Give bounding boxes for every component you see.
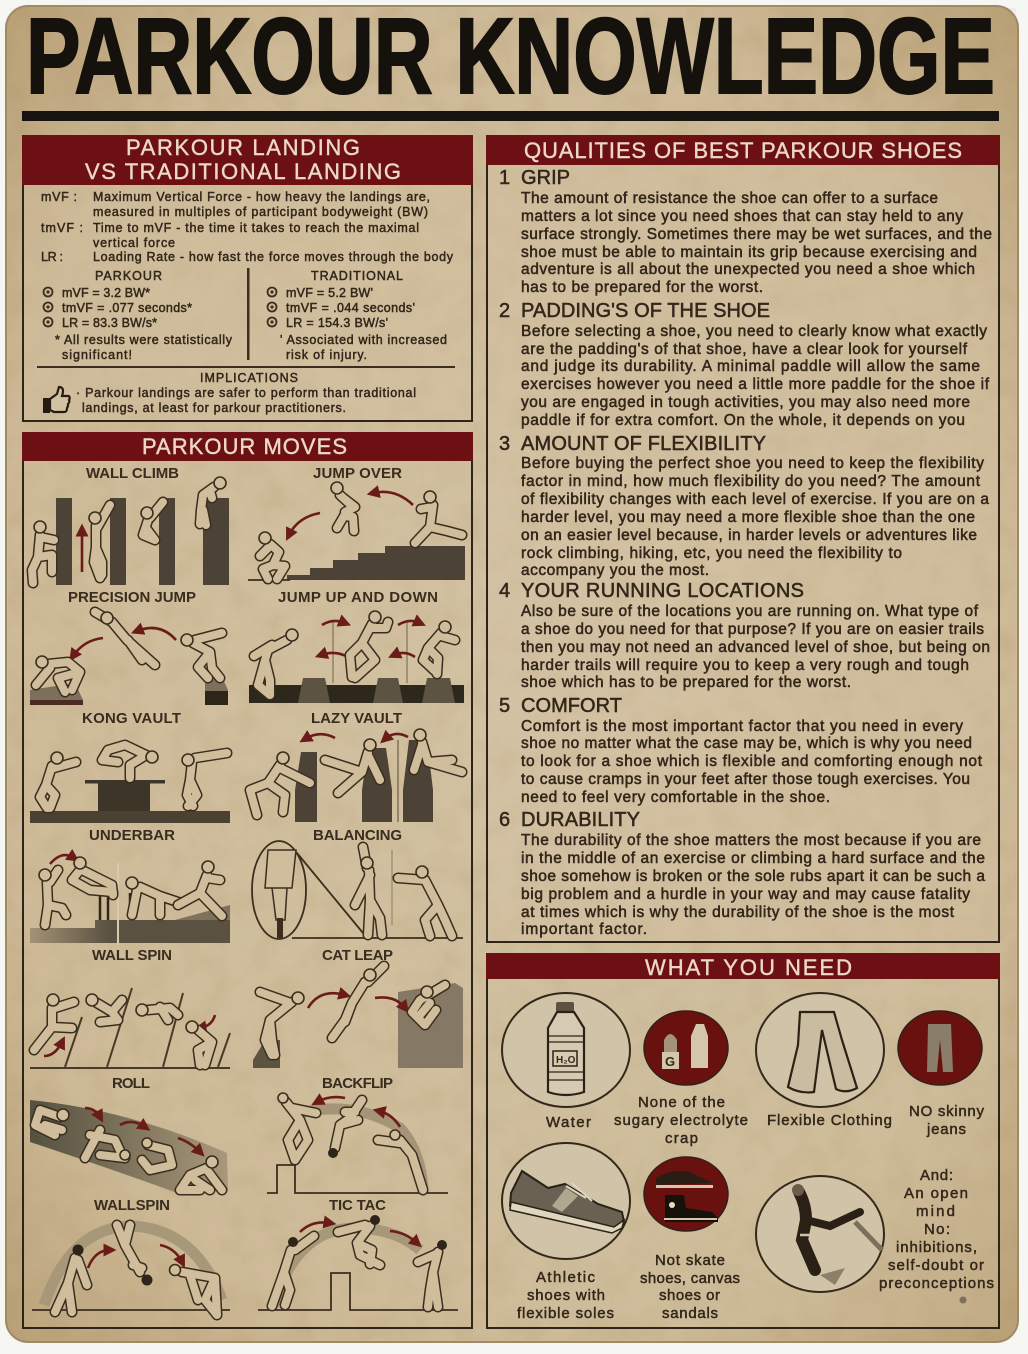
section 4: running locations: [499, 580, 990, 691]
move: jump over: JUMP OVER: [313, 465, 402, 482]
section 6: durability: big problem and a hurdle in your way and may cause fatality: [521, 886, 970, 903]
move: jump up and down: JUMP UP AND DOWN: [278, 589, 438, 606]
item: athletic shoes: Athletic: [536, 1269, 596, 1286]
section 1: grip: The amount of resistance the shoe can offer to a surface: [521, 190, 938, 207]
item: open mind: An open: [904, 1185, 968, 1202]
landing header: VS TRADITIONAL LANDING: [85, 159, 401, 184]
section 1: grip: [499, 167, 992, 296]
section 1: grip: surface strongly. Sometimes there may be wet surfaces, and the: [521, 226, 992, 243]
parkour results: PARKOUR: [95, 269, 162, 283]
item: no skate shoes: shoes or: [659, 1287, 720, 1304]
section 2: padding: paddle if for extra comfort. On the whole, it depends on you: [521, 412, 965, 429]
item: athletic shoes: shoes with: [527, 1287, 605, 1304]
traditional results: TRADITIONAL: [311, 269, 403, 283]
item: open mind: And:: [920, 1167, 953, 1184]
move: wall spin: [30, 947, 230, 1068]
definitions: Maximum Vertical Force - how heavy the landings are,: [93, 190, 430, 204]
section 6: durability: DURABILITY: [521, 809, 640, 831]
section 5: comfort: to cause cramps in your feet after those tough exercises. You: [521, 771, 970, 788]
section 2: padding: PADDING'S OF THE SHOE: [521, 300, 770, 322]
section 3: flexibility: harder level, you may need a more flexible shoe than the one: [521, 509, 975, 526]
section 4: running locations: Also be sure of the locations you are running on. What type of: [521, 603, 979, 620]
parkour results: tmVF = .077 seconds*: [62, 301, 192, 315]
section 5: comfort: [499, 695, 983, 806]
section 3: flexibility: on an easier level because, in harder levels or adventures like: [521, 527, 977, 544]
section 3: flexibility: Before buying the perfect shoe you need to keep the flexibility: [521, 455, 984, 472]
traditional results: mVF = 5.2 BW': [286, 286, 373, 300]
section 2: padding: are the padding's of that shoe, have a clear look for yourself: [521, 341, 968, 358]
panel: landing comparison: [22, 135, 473, 421]
section 2: padding: Before selecting a shoe, you need to clearly know what exactly: [521, 323, 987, 340]
move: kong vault: KONG VAULT: [82, 710, 181, 727]
move: balancing: BALANCING: [313, 827, 402, 844]
definitions: measured in multiples of participant bodyweight (BW): [93, 205, 428, 219]
item: no electrolyte drinks: None of the: [638, 1094, 725, 1111]
move: precision jump: PRECISION JUMP: [68, 589, 196, 606]
section 6: durability: in the middle of an exercise or climbing a hard surface and the: [521, 850, 985, 867]
icon: skinny jeans: [927, 1024, 953, 1072]
implications: landings, at least for parkour practitioners.: [82, 401, 346, 415]
implications: · Parkour landings are safer to perform than traditional: [76, 386, 416, 400]
item: open mind: preconceptions: [879, 1275, 994, 1292]
section 4: running locations: then you may not need an advanced level of shoe, but being on: [521, 639, 990, 656]
definitions: Loading Rate - how fast the force moves through the body: [93, 250, 454, 264]
section 5: comfort: 5: [499, 695, 510, 717]
icon: sports drinks: G: [665, 1054, 675, 1069]
panel: what you need: [486, 953, 1000, 1328]
item: athletic shoes: [502, 1143, 630, 1322]
need header: [486, 953, 1000, 980]
traditional results: tmVF = .044 seconds': [286, 301, 415, 315]
definitions: Time to mVF - the time it takes to reach the maximal: [93, 221, 419, 235]
section 5: comfort: COMFORT: [521, 695, 622, 717]
item: no skinny jeans: [898, 1011, 984, 1138]
panel: parkour moves: [22, 432, 473, 1328]
icon: loose trousers: [788, 1012, 857, 1092]
item: no skate shoes: shoes, canvas: [640, 1270, 740, 1287]
item: open mind: mind: [916, 1203, 955, 1220]
section 1: grip: has to be prepared for the worst.: [521, 279, 763, 296]
item: athletic shoes: flexible soles: [517, 1305, 614, 1322]
item: no skate shoes: [640, 1157, 740, 1322]
item: flexible clothing: [756, 993, 892, 1129]
move: balancing: [252, 827, 463, 939]
definitions: [41, 190, 454, 264]
move: wall spin: WALL SPIN: [92, 947, 172, 964]
implications: [43, 371, 416, 415]
item: no skate shoes: Not skate: [655, 1252, 725, 1269]
move: lazy vault: [250, 710, 462, 822]
traditional results: [268, 269, 447, 362]
item: open mind: No:: [924, 1221, 950, 1238]
section 3: flexibility: factor in mind, how much flexibility do you need? The amount: [521, 473, 981, 490]
item: no electrolyte drinks: [614, 1011, 748, 1147]
move: lazy vault: LAZY VAULT: [311, 710, 402, 727]
section 5: comfort: to look for a shoe which is flexible and comforting enough not: [521, 753, 983, 770]
parkour results: mVF = 3.2 BW*: [62, 286, 150, 300]
move: cat leap: CAT LEAP: [322, 947, 393, 964]
section 6: durability: 6: [499, 809, 510, 831]
move: jump up and down: [249, 589, 464, 703]
traditional results: LR = 154.3 BW/s': [286, 316, 388, 330]
section 3: flexibility: of flexibility changes with each level of exercise. If you are on a: [521, 491, 989, 508]
section 3: flexibility: rock climbing, hiking, etc, you need the flexibility to: [521, 545, 902, 562]
move: wall climb: [32, 465, 229, 585]
section 2: padding: and judge its durability. A minimal paddle will allow the same: [521, 358, 980, 375]
traditional results: ' Associated with increased: [280, 333, 447, 347]
item: no skinny jeans: NO skinny: [909, 1103, 984, 1120]
panel: qualities of best parkour shoes: [486, 135, 1000, 942]
move: jump over: [248, 465, 465, 580]
move: wallspin: WALLSPIN: [94, 1197, 170, 1214]
section 4: running locations: shoe which has to be prepared for the worst.: [521, 674, 851, 691]
section 5: comfort: Comfort is the most important factor that you need in every: [521, 718, 963, 735]
item: open mind: [756, 1167, 994, 1292]
moves header: PARKOUR MOVES: [142, 434, 347, 459]
section 5: comfort: need to feel very comfortable in the shoe.: [521, 789, 830, 806]
move: backflip: BACKFLIP: [322, 1075, 393, 1092]
section 1: grip: shoe must be able to maintain its grip because exercising and: [521, 244, 977, 261]
landing header: [22, 135, 473, 185]
parkour results: significant!: [62, 348, 132, 362]
icon: running shoe: [510, 1171, 624, 1233]
move: tic tac: [258, 1197, 458, 1310]
move: tic tac: TIC TAC: [329, 1197, 386, 1214]
moves header: [22, 432, 473, 461]
item: no skate shoes: sandals: [662, 1305, 718, 1322]
icon: fighter kicking: [792, 1184, 882, 1285]
icon: skate shoe and high-top: [656, 1171, 718, 1222]
definitions: tmVF :: [41, 221, 83, 235]
section 2: padding: exercises however you need a little more paddle for the shoe if: [521, 376, 990, 393]
parkour results: * All results were statistically: [55, 333, 233, 347]
section 2: padding: you are engaged in tough activities, you may also need more: [521, 394, 970, 411]
section 2: padding: [499, 300, 990, 429]
landing header: PARKOUR LANDING: [126, 135, 360, 160]
move: roll: ROLL: [112, 1075, 150, 1092]
definitions: mVF :: [41, 190, 77, 204]
parkour results: LR = 83.3 BW/s*: [62, 316, 157, 330]
section 4: running locations: harder trails will require you to keep a very rough and tough: [521, 657, 969, 674]
section 4: running locations: a shoe do you need for that purpose? If you are on easier trails: [521, 621, 984, 638]
need header: WHAT YOU NEED: [645, 955, 852, 980]
item: no electrolyte drinks: sugary electrolyte: [614, 1112, 748, 1129]
section 6: durability: The durability of the shoe matters the most because if you are: [521, 832, 981, 849]
section 1: grip: matters a lot since you need shoes that can stay held to any: [521, 208, 963, 225]
section 5: comfort: shoe no matter what the case may be, which is why you need: [521, 735, 972, 752]
section 3: flexibility: accompany you the most.: [521, 562, 709, 579]
icon: water bottle: H₂O: [556, 1055, 576, 1066]
section 6: durability: shoe somehow is broken or the sole rubs apart it can be such a: [521, 868, 985, 885]
section 1: grip: GRIP: [521, 167, 570, 189]
move: roll: [30, 1075, 228, 1194]
section 6: durability: important factor.: [521, 921, 647, 938]
section 4: running locations: YOUR RUNNING LOCATIONS: [521, 580, 804, 602]
move: precision jump: [30, 589, 228, 705]
traditional results: risk of injury.: [286, 348, 367, 362]
item: no electrolyte drinks: crap: [665, 1130, 698, 1147]
section 2: padding: 2: [499, 300, 510, 322]
icon: thumbs up: [43, 387, 70, 413]
item: open mind: self-doubt or: [888, 1257, 984, 1274]
item: water: Water: [546, 1114, 591, 1131]
move: underbar: UNDERBAR: [89, 827, 175, 844]
move: kong vault: [30, 710, 230, 823]
section 3: flexibility: 3: [499, 433, 510, 455]
move: underbar: [30, 827, 230, 945]
shoes header: QUALITIES OF BEST PARKOUR SHOES: [524, 138, 962, 163]
item: no skinny jeans: jeans: [926, 1121, 966, 1138]
item: water: [502, 993, 630, 1131]
move: wall climb: WALL CLIMB: [86, 465, 179, 482]
definitions: vertical force: [93, 236, 175, 250]
section 6: durability: [499, 809, 985, 938]
parkour results: [44, 269, 233, 362]
move: cat leap: [253, 947, 463, 1068]
move: backflip: [267, 1075, 448, 1193]
section 3: flexibility: AMOUNT OF FLEXIBILITY: [521, 433, 766, 455]
section 4: running locations: 4: [499, 580, 510, 602]
item: flexible clothing: Flexible Clothing: [767, 1112, 892, 1129]
move: wallspin: [32, 1197, 230, 1315]
section 3: flexibility: [499, 433, 989, 579]
section 1: grip: adventure is all about the unexpected you need a shoe which: [521, 261, 975, 278]
item: open mind: inhibitions,: [896, 1239, 977, 1256]
section 6: durability: at times which is why the durability of the shoe is the most: [521, 904, 955, 921]
section 1: grip: 1: [499, 167, 510, 189]
implications: IMPLICATIONS: [200, 371, 298, 385]
definitions: LR :: [41, 250, 63, 264]
